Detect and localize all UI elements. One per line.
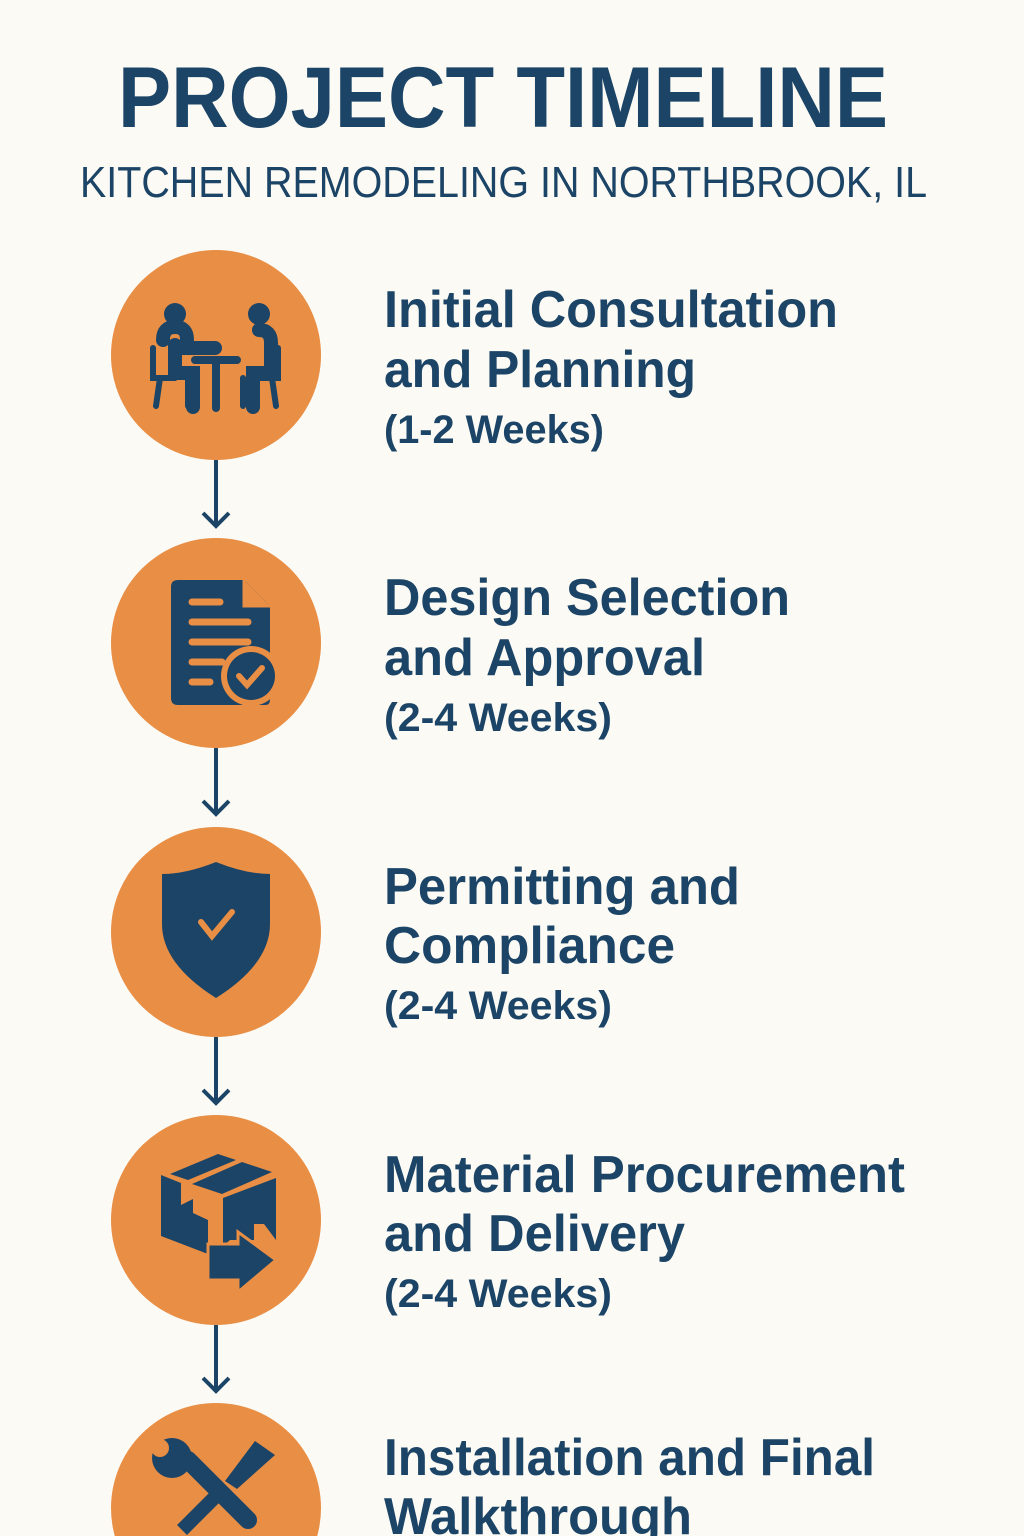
step 1 text: (1-2 Weeks) (384, 408, 604, 452)
step 1 text: and Planning (384, 341, 696, 399)
step 5 text: Installation and Final (384, 1429, 875, 1487)
step 2 text: and Approval (384, 629, 705, 687)
icon: wrench and screwdriver (111, 1403, 321, 1536)
arrow 2 (203, 748, 229, 814)
step 1: consultation (111, 250, 838, 460)
step 1 text: Initial Consultation (384, 281, 838, 339)
arrow 3 (203, 1037, 229, 1103)
step 3 text: Compliance (384, 917, 675, 975)
icon: shield check (111, 827, 321, 1037)
step 3 text: Permitting and (384, 858, 740, 916)
icon: consultation meeting (111, 250, 321, 460)
step 4 text: (2-4 Weeks) (384, 1272, 612, 1316)
arrow 1 (203, 460, 229, 526)
step 1 text (384, 281, 838, 452)
step 2 text: (2-4 Weeks) (384, 696, 612, 740)
step 4 text (384, 1146, 905, 1316)
step 4 text: Material Procurement (384, 1146, 905, 1204)
title: PROJECT TIMELINE (118, 50, 888, 146)
step 3 text: (2-4 Weeks) (384, 984, 612, 1028)
arrow 4 (203, 1325, 229, 1391)
step 3 text (384, 858, 740, 1028)
step 2 text: Design Selection (384, 569, 790, 627)
step 4: material (111, 1115, 905, 1325)
step 4 text: and Delivery (384, 1205, 685, 1263)
step 3: permitting (111, 827, 740, 1037)
step 2: design (111, 538, 790, 748)
icon: box delivery (111, 1115, 321, 1325)
step 2 text (384, 569, 790, 740)
step 5: installation (111, 1403, 875, 1536)
icon: document check (111, 538, 321, 748)
subtitle: KITCHEN REMODELING IN NORTHBROOK, IL (80, 158, 927, 207)
step 5 text (384, 1429, 875, 1536)
